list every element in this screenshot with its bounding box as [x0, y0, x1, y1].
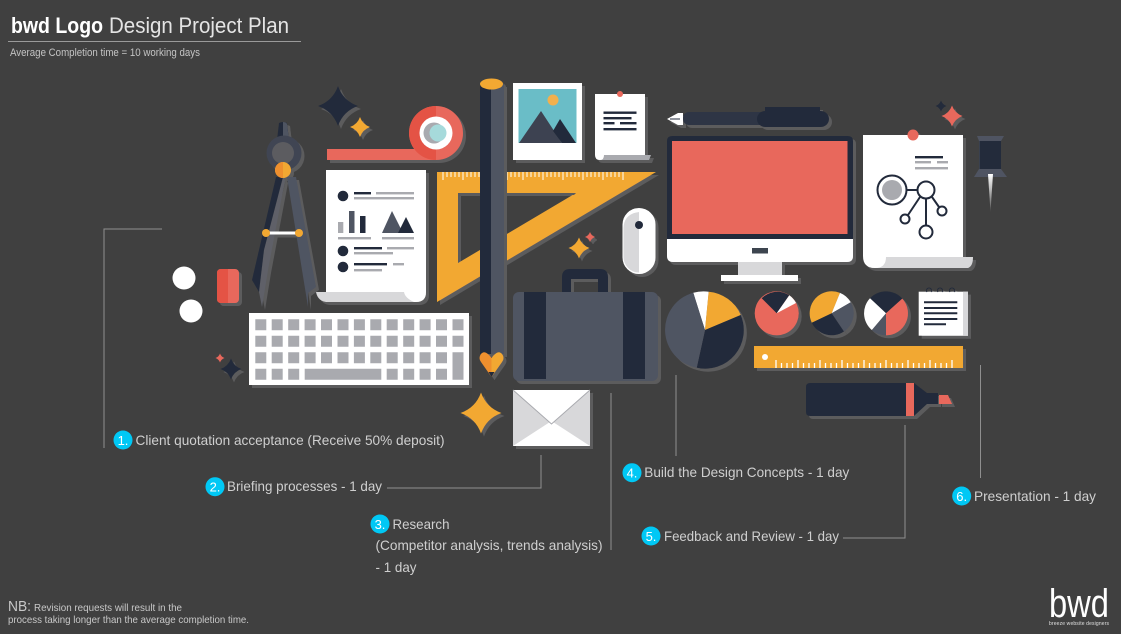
icon: ruler [754, 346, 963, 368]
icon: white circles [172, 266, 202, 322]
icon: small orange star [350, 117, 370, 137]
icon: envelope [513, 390, 590, 446]
title [8, 13, 301, 42]
icon: highlighter [806, 383, 952, 416]
step 3 label [370, 514, 602, 575]
title: bwd Logo [11, 13, 103, 38]
step 6 label: 6. [956, 489, 967, 504]
icon: large dark star [318, 86, 358, 126]
leader line 3 [610, 393, 612, 550]
note: revision requests [8, 598, 249, 626]
icon: large orange star [460, 392, 502, 434]
icon: pen [667, 107, 829, 127]
leader line 6 [980, 365, 982, 478]
note: revision requests: NB: [8, 598, 31, 615]
icon: eraser [217, 269, 239, 303]
step 2 label: 2. [210, 480, 220, 494]
step 3 label: Research [392, 516, 450, 532]
step 3 label: (Competitor analysis, trends analysis) [376, 537, 602, 553]
step 4 label: Build the Design Concepts - 1 day [644, 464, 849, 480]
step 2 label: Briefing processes - 1 day [227, 478, 382, 494]
leader line 5 [843, 425, 905, 538]
icon: compass [252, 122, 316, 307]
chart: pie 2 [755, 291, 799, 335]
chart: pie 4 [864, 291, 908, 335]
icon: tape roll [327, 106, 463, 160]
logo: bwd: breeze website designers [1049, 621, 1110, 627]
logo: bwd: bwd [1049, 582, 1109, 626]
icon: keyboard [249, 313, 469, 385]
icon: pushpin [974, 136, 1007, 212]
step 3 label: 3. [375, 517, 385, 532]
leader line 2 [387, 455, 541, 488]
title: Design Project Plan [109, 13, 289, 38]
step 3 label: - 1 day [376, 559, 416, 575]
icon: monitor [667, 136, 853, 281]
icon: briefcase [513, 269, 658, 381]
leader line 1 [104, 229, 162, 448]
icon: pencil [480, 78, 504, 377]
step 1 label: Client quotation acceptance (Receive 50% deposit) [136, 432, 444, 448]
icon: pinned note [595, 91, 651, 160]
icon: network diagram document [863, 130, 973, 268]
subtitle: average completion time: Average Completion time = 10 working days [10, 47, 200, 59]
note: revision requests: process taking longer than the average completion time. [8, 614, 249, 626]
icon: mouse [622, 208, 656, 274]
step 5 label: Feedback and Review - 1 day [664, 528, 839, 544]
icon: report document [316, 170, 426, 302]
icon: stars near mouse [568, 232, 595, 258]
note: revision requests: Revision requests will result in the [34, 602, 182, 614]
chart: large pie [665, 291, 744, 369]
icon: spiral notepad [919, 288, 968, 336]
chart: pie 3 [810, 291, 854, 335]
icon: small stars top right [936, 100, 962, 126]
step 4 label: 4. [627, 466, 637, 480]
step 6 label: Presentation - 1 day [974, 488, 1096, 504]
step 1 label: 1. [118, 433, 128, 448]
icon: picture frame [513, 83, 582, 160]
icon: set square [437, 172, 656, 302]
leader line 4 [675, 375, 677, 456]
icon: stars left of keyboard [216, 354, 242, 380]
step 5 label: 5. [646, 529, 656, 544]
